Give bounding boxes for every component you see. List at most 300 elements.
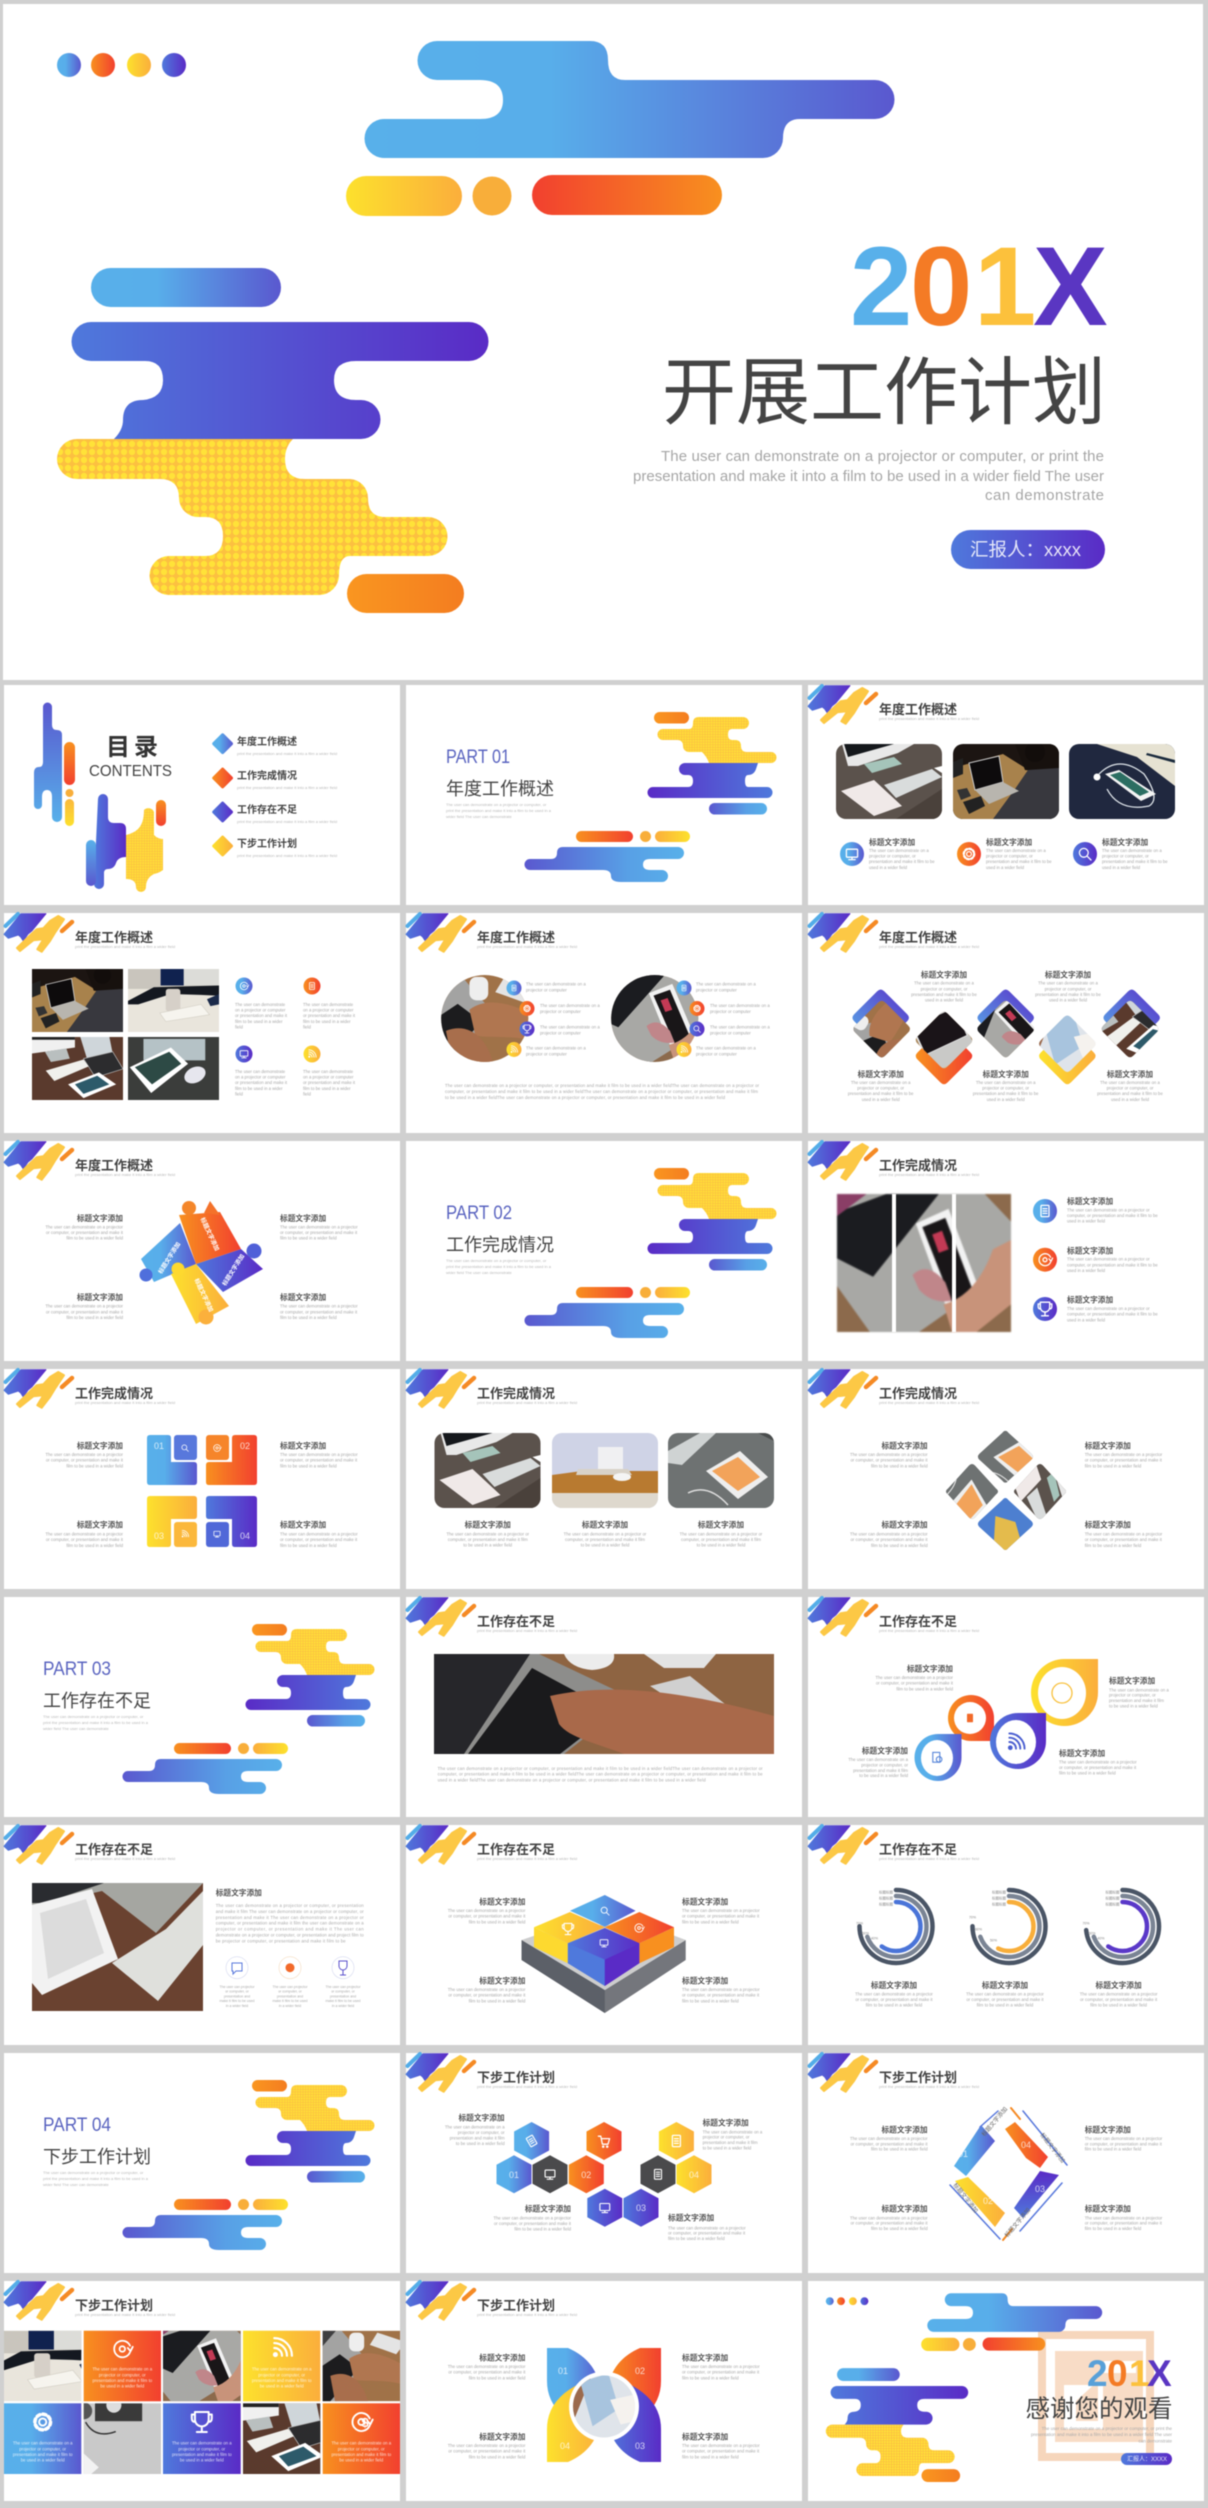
- caption 4: film to be used in a wider field: [1059, 1770, 1116, 1776]
- puzzle diagram: 标题文字添加: [193, 1277, 215, 1313]
- caption 3: or computer, or presentation and make it: [494, 2221, 572, 2226]
- caption 3: computer, or presentation and make it film: [681, 1537, 761, 1542]
- caption top right: film to be used in a wider field: [1085, 2147, 1142, 2152]
- panel: cover slide: [3, 4, 1203, 680]
- photo 2: [552, 1433, 658, 1508]
- frame diagram: 标题文字添加: [951, 2181, 980, 2214]
- caption 2: The user can demonstrate on a projector or: [564, 1531, 647, 1536]
- section description: wider field The user can demonstrate: [446, 1270, 513, 1275]
- text block 4: or presentation and make it: [303, 1080, 356, 1085]
- text block 1: The user can demonstrate on a projector or: [1067, 1207, 1150, 1212]
- cover description: can demonstrate: [985, 487, 1104, 504]
- mosaic yellow cell: be used in a wider field: [260, 2384, 304, 2388]
- panel: numbered blocks: [4, 1369, 400, 1589]
- caption bottom left: 标题文字添加: [77, 1520, 123, 1530]
- caption top left: [45, 1213, 124, 1241]
- mosaic orange cell: The user can demonstrate on a: [92, 2367, 153, 2372]
- caption top left: or computer, or presentation and make it: [46, 1458, 124, 1463]
- section artwork: [524, 712, 776, 882]
- paragraph: computer, or presentation and make it film the user can demonstrate on a: [216, 1921, 364, 1926]
- panel: part 04 section slide: [4, 2053, 400, 2273]
- caption 4: 标题文字添加: [1059, 1748, 1105, 1758]
- caption top right: The user can demonstrate on a projector: [682, 2364, 760, 2369]
- panel: teardrop diagram: [808, 1597, 1204, 1817]
- caption top left: [45, 1440, 124, 1468]
- caption top right: or computer, or presentation and make it: [1085, 1458, 1163, 1463]
- text block 1: film to be used in a wider: [235, 1019, 283, 1024]
- caption top left: film to be used in a wider field: [66, 1236, 124, 1241]
- caption 2: 标题文字添加: [703, 2117, 749, 2127]
- caption top 1: projector or computer, or: [921, 986, 968, 991]
- paragraph: presentation and make it The user can demonstrate on a projector or: [216, 1915, 364, 1920]
- text block 4: on a projector or computer: [303, 1075, 354, 1080]
- caption bottom 1: 标题文字添加: [858, 1069, 904, 1079]
- caption 2: projector or computer, or: [703, 2135, 750, 2140]
- caption bottom left: or computer, or presentation and make it: [850, 1537, 928, 1542]
- header logo: [406, 1370, 474, 1408]
- teardrop blue: [914, 1734, 962, 1781]
- ring chart 2: 60%: [975, 1928, 982, 1932]
- ring chart 2: [969, 1890, 1046, 1963]
- caption top right: The user can demonstrate on a projector: [280, 1452, 358, 1457]
- ring chart 2: 70%: [969, 1916, 976, 1920]
- mosaic purple cell: [163, 2403, 241, 2474]
- caption bottom 1: used in a wider field: [862, 1097, 900, 1102]
- part label: PART 04: [43, 2115, 111, 2136]
- header logo: [808, 1598, 876, 1636]
- caption bottom 3: used in a wider field: [1111, 1097, 1150, 1102]
- puzzle diagram: [140, 1201, 263, 1324]
- caption bottom right: [1085, 2204, 1163, 2231]
- slide subtitle: print the presentation and make it into a film a wider field: [75, 1172, 175, 1177]
- caption bottom right: or computer, or presentation and make it: [1085, 2221, 1163, 2226]
- caption bottom left: 标题文字添加: [479, 1975, 526, 1985]
- caption 2: 标题文字添加: [982, 1980, 1028, 1990]
- caption top left: The user can demonstrate on a projector: [850, 1452, 928, 1457]
- wide photo: [434, 1654, 774, 1754]
- block 02: [206, 1435, 257, 1485]
- diamond 4: [1038, 1015, 1096, 1085]
- caption top right: 标题文字添加: [280, 1213, 326, 1223]
- agenda item 4: 下步工作计划: [237, 837, 297, 850]
- slide subtitle: print the presentation and make it into a film a wider field: [75, 2312, 175, 2317]
- caption top right: The user can demonstrate on a projector: [682, 1908, 760, 1913]
- frame diagram: 01: [958, 2149, 968, 2159]
- panel: four photo grid: [4, 913, 400, 1133]
- three strip photo: [837, 1194, 1011, 1332]
- caption 3: [493, 2204, 572, 2232]
- cover description: The user can demonstrate on a projector or computer, or print the: [661, 448, 1104, 465]
- caption bottom left: [448, 1975, 526, 2003]
- caption 2: The user can demonstrate on a projector: [966, 1991, 1044, 1996]
- caption 1: 标题文字添加: [465, 1520, 511, 1530]
- main title: 开展工作计划: [662, 351, 1106, 434]
- caption 2: film to be used in a wider field: [977, 2003, 1034, 2008]
- agenda item 2: [212, 768, 337, 790]
- header logo: [4, 2282, 72, 2320]
- paragraph: be projector or computer, or presentation and make it film to be: [216, 1938, 346, 1943]
- cover artwork: clouds, pills and dots: [57, 41, 894, 613]
- puzzle diagram: 标题文字添加: [156, 1241, 182, 1275]
- rhombus photo left: [945, 1463, 999, 1520]
- mosaic photo 5: [232, 2403, 332, 2474]
- caption top left: [448, 2352, 526, 2380]
- caption top 2: used in a wider field: [1049, 998, 1088, 1002]
- caption bottom right: film to be used in a wider field: [1085, 1543, 1142, 1548]
- icon: gear: [957, 842, 981, 866]
- text block 4: field: [303, 1091, 311, 1096]
- caption top left: The user can demonstrate on a projector: [850, 2136, 928, 2141]
- text block 2: projector or computer, or: [986, 854, 1033, 859]
- section description: print the presentation and make it into a film to be used in a: [446, 808, 552, 813]
- caption bottom 1: [848, 1069, 914, 1102]
- caption 1: 标题文字添加: [871, 1980, 917, 1990]
- icon 3: [1033, 1297, 1057, 1321]
- year 201X: 0: [1107, 2353, 1128, 2394]
- icon caption 3: in a wider field: [332, 2004, 354, 2008]
- header logo: [406, 1826, 474, 1864]
- 3D diamond: [522, 1895, 686, 2013]
- circular photo left: [440, 974, 530, 1063]
- teardrop yellow: [1031, 1659, 1098, 1726]
- photo 2: [953, 742, 1059, 819]
- slide title: 工作存在不足: [477, 1614, 555, 1629]
- caption bottom right: [280, 1292, 358, 1320]
- block 03: [147, 1496, 197, 1547]
- ring chart 3: 60%: [1088, 1932, 1096, 1936]
- caption bottom 1: projector or computer, or: [857, 1086, 905, 1091]
- icon 2: [1033, 1248, 1057, 1272]
- mosaic orange cell 2: presentation and make it film to: [331, 2452, 392, 2457]
- left captions: [526, 981, 600, 1057]
- frame diagram: 03: [1035, 2184, 1045, 2194]
- caption top 2: [1035, 970, 1101, 1002]
- caption bottom left: or computer, or presentation and make it: [448, 1993, 526, 1998]
- icon 4: [304, 1046, 320, 1062]
- hexagon cluster: [496, 2122, 712, 2227]
- caption bottom right: film to be used in a wider field: [682, 2454, 739, 2459]
- caption bottom 2: presentation and make it film to be: [973, 1091, 1039, 1096]
- left captions: The user can demonstrate on a: [540, 1024, 600, 1029]
- mosaic orange cell: presentation and make it film to: [92, 2378, 153, 2383]
- block 02: 02: [240, 1441, 250, 1451]
- header logo: [4, 1142, 72, 1180]
- caption bottom right: film to be used in a wider field: [1085, 2226, 1142, 2231]
- section description: print the presentation and make it into a film to be used in a: [43, 2176, 149, 2181]
- text block 2: 标题文字添加: [986, 837, 1032, 847]
- caption 1: presentation and make it film: [450, 2136, 505, 2140]
- right captions: The user can demonstrate on a: [696, 981, 756, 986]
- caption 1: The user can demonstrate on a projector or: [446, 1531, 530, 1536]
- caption 2: The user can demonstrate on a: [1109, 1687, 1169, 1692]
- right captions: The user can demonstrate on a: [710, 1003, 770, 1008]
- mosaic blue cell: The user can demonstrate on a: [13, 2441, 73, 2446]
- caption 2: [564, 1520, 647, 1548]
- caption bottom right: or computer, or presentation and make it: [280, 1537, 358, 1542]
- right icon dots: [676, 980, 704, 1057]
- slide subtitle: print the presentation and make it into a film a wider field: [75, 944, 175, 949]
- text block 1: computer, or presentation and make it film to be: [1067, 1213, 1158, 1218]
- caption bottom right: [682, 1975, 760, 2003]
- caption top left: 标题文字添加: [881, 1440, 928, 1450]
- panel: wide photo slide: [406, 1597, 802, 1817]
- caption bottom right: 标题文字添加: [280, 1292, 326, 1302]
- caption bottom left: film to be used in a wider field: [469, 1998, 526, 2003]
- section description: wider field The user can demonstrate: [446, 814, 513, 819]
- ring chart 1: 70%: [856, 1922, 863, 1926]
- section description: The user can demonstrate on a projector or computer, or: [446, 1258, 547, 1263]
- year 201X: 1: [1129, 2353, 1150, 2394]
- teardrop purple: [990, 1713, 1046, 1769]
- caption bottom left: The user can demonstrate on a projector: [45, 1531, 124, 1536]
- caption bottom 1: presentation and make it film to be: [848, 1091, 914, 1096]
- slide title: 工作完成情况: [477, 1386, 555, 1401]
- bottom paragraph: The user can demonstrate on a projector or computer, or presentation and make it film to be used in a wider fieldThe user can demonstrate on a projector or: [445, 1083, 760, 1088]
- text block 2: or presentation and make it: [303, 1013, 356, 1018]
- left captions: projector or computer: [540, 1009, 581, 1014]
- icon: monitor: [840, 842, 864, 866]
- slide subtitle: print the presentation and make it into a film a wider field: [477, 2312, 577, 2317]
- text block 1: 标题文字添加: [869, 837, 915, 847]
- caption 2: [966, 1980, 1044, 2008]
- slide subtitle: print the presentation and make it into a film a wider field: [477, 1856, 577, 1861]
- caption top right: [280, 1440, 358, 1468]
- caption top left: or computer, or presentation and make it: [46, 1230, 124, 1235]
- header logo: [808, 1826, 876, 1864]
- caption 1: to be used in a wider field: [456, 2141, 505, 2146]
- caption top left: 标题文字添加: [77, 1440, 123, 1450]
- slide title: 年度工作概述: [477, 930, 555, 945]
- caption 1: or computer, or presentation and make it: [876, 1681, 954, 1686]
- text block 3: film to be used in a wider: [235, 1086, 283, 1091]
- block 03: 03: [154, 1531, 164, 1541]
- text block 3: The user can demonstrate on a projector or: [1067, 1306, 1150, 1311]
- caption bottom left: [45, 1292, 124, 1320]
- mosaic blue cell: presentation and make it film to: [13, 2452, 73, 2457]
- slide subtitle: print the presentation and make it into a film a wider field: [879, 716, 979, 721]
- hexagon cluster: 03: [636, 2203, 646, 2213]
- caption bottom left: The user can demonstrate on a projector: [850, 1531, 928, 1536]
- slide subtitle: print the presentation and make it into a film a wider field: [477, 1400, 577, 1405]
- text block 1: [1067, 1196, 1158, 1224]
- ring chart 1: 标题标题: [879, 1896, 893, 1900]
- mosaic orange cell: be used in a wider field: [100, 2384, 145, 2388]
- caption top right: [682, 1896, 760, 1924]
- paragraph: demonstrate on a projector or computer, or presentation and project film to: [216, 1932, 364, 1938]
- caption bottom right: [1085, 1520, 1163, 1548]
- header logo: [406, 2282, 474, 2320]
- caption 1: projector or computer, or: [458, 2130, 505, 2135]
- slide title: 下步工作计划: [477, 2298, 555, 2313]
- header logo: [808, 2054, 876, 2092]
- panel: part 03 section slide: [4, 1597, 400, 1817]
- caption 1: film to be used in a wider field: [896, 1686, 954, 1691]
- caption top right: or computer, or presentation and make it: [1085, 2141, 1163, 2146]
- text block 3: 标题文字添加: [1102, 837, 1148, 847]
- caption 4: The user can demonstrate on a projector: [668, 2225, 746, 2230]
- mosaic blue cell: [4, 2403, 81, 2474]
- slide subtitle: print the presentation and make it into a film a wider field: [879, 944, 979, 949]
- section title: 年度工作概述: [446, 779, 554, 799]
- diamond 2: [915, 1011, 973, 1085]
- caption bottom left: film to be used in a wider field: [871, 1543, 928, 1548]
- caption 3: 标题文字添加: [1096, 1980, 1142, 1990]
- panel: three photos with icons: [808, 685, 1204, 905]
- caption top left: The user can demonstrate on a projector: [45, 1224, 124, 1229]
- slide title: 下步工作计划: [879, 2070, 957, 2085]
- caption bottom left: The user can demonstrate on a projector: [448, 2443, 526, 2448]
- caption top right: 标题文字添加: [682, 1896, 728, 1906]
- mosaic blue cell: be used in a wider field: [21, 2458, 65, 2462]
- header logo: [808, 686, 876, 724]
- text block 4: The user can demonstrate: [303, 1069, 354, 1074]
- right captions: projector or computer: [710, 1009, 751, 1014]
- seal stamp watermark: [1042, 2335, 1150, 2457]
- rhombus photo top: [977, 1430, 1034, 1484]
- slide title: 工作完成情况: [879, 1386, 957, 1401]
- caption 1: computer, or presentation and make it film: [448, 1537, 528, 1542]
- caption 3: 标题文字添加: [698, 1520, 744, 1530]
- block 04: 04: [240, 1531, 250, 1541]
- caption 1: [875, 1663, 954, 1691]
- caption 4: or computer, or presentation and make it: [668, 2231, 746, 2236]
- caption bottom 3: presentation and make it film to be: [1097, 1091, 1163, 1096]
- text block 3: used in a wider field: [1067, 1317, 1106, 1322]
- caption 2: presentation and make it film: [703, 2140, 758, 2145]
- photo 3: [1069, 744, 1175, 819]
- caption 1: 标题文字添加: [458, 2113, 505, 2123]
- caption top right: [1085, 2124, 1163, 2152]
- part label: PART 02: [446, 1203, 512, 1224]
- section description: print the presentation and make it into a film to be used in a: [43, 1720, 149, 1725]
- right captions: projector or computer: [696, 987, 737, 992]
- slide title: 工作存在不足: [879, 1614, 957, 1629]
- caption top left: The user can demonstrate on a projector: [448, 2364, 526, 2369]
- text block 3: [1102, 837, 1168, 870]
- ring chart 1: 60%: [862, 1932, 869, 1936]
- caption bottom left: [850, 1520, 928, 1548]
- bottom paragraph: to be used in a wider fieldThe user can demonstrate on a projector or computer, or presentation and make it film to be used in a wider field: [445, 1095, 726, 1100]
- ring chart 2: 标题标题: [992, 1890, 1006, 1894]
- icon caption 3: The user can projector: [325, 1985, 361, 1989]
- text block 3: on a projector or computer: [235, 1075, 286, 1080]
- header logo: [4, 1370, 72, 1408]
- mosaic orange cell 2: be used in a wider field: [339, 2458, 384, 2462]
- caption top left: film to be used in a wider field: [469, 2375, 526, 2380]
- paragraph: and make it film The user can demonstrate on a projector or computer, or: [216, 1909, 364, 1914]
- mosaic yellow cell: presentation and make it film to: [252, 2378, 312, 2383]
- caption top left: The user can demonstrate on a projector: [45, 1452, 124, 1457]
- caption bottom 2: The user can demonstrate on a: [976, 1080, 1036, 1085]
- caption top right: The user can demonstrate on a projector: [280, 1224, 358, 1229]
- icon caption 3: or computer, or: [331, 1990, 356, 1994]
- teardrop orange: [948, 1695, 994, 1741]
- part label: PART 03: [43, 1659, 111, 1680]
- text block 2: used in a wider field: [1067, 1268, 1106, 1273]
- diamond 5: [1101, 988, 1161, 1058]
- caption bottom left: or computer, or presentation and make it: [46, 1309, 124, 1314]
- caption top left: 标题文字添加: [77, 1213, 123, 1223]
- large photo: [32, 1883, 203, 2011]
- caption 2: to be used in a wider field: [581, 1543, 630, 1548]
- caption top right: film to be used in a wider field: [280, 1236, 337, 1241]
- header logo: [4, 914, 72, 952]
- section description: The user can demonstrate on a projector or computer, or: [43, 1714, 144, 1719]
- caption 4: 标题文字添加: [668, 2213, 714, 2223]
- agenda item 3: print the presentation and make it into a film a wider field: [237, 819, 337, 824]
- agenda item 4: print the presentation and make it into a film a wider field: [237, 853, 337, 858]
- caption bottom right: [280, 1520, 358, 1548]
- caption bottom right: 标题文字添加: [1085, 1520, 1131, 1530]
- caption 3: or computer, or presentation and make it: [1080, 1997, 1158, 2002]
- slide subtitle: print the presentation and make it into a film a wider field: [477, 2084, 577, 2089]
- icon caption 3: presentation and: [330, 1994, 356, 1998]
- caption top right: or computer, or presentation and make it: [280, 1230, 358, 1235]
- text block 3: 标题文字添加: [1067, 1295, 1113, 1305]
- caption bottom left: The user can demonstrate on a projector: [850, 2215, 928, 2220]
- panel: part 02 section slide: [406, 1141, 802, 1361]
- caption bottom left: The user can demonstrate on a projector: [448, 1987, 526, 1992]
- mosaic orange cell: projector or computer, or: [99, 2372, 146, 2377]
- slide title: 工作存在不足: [879, 1842, 957, 1857]
- caption bottom left: [850, 2204, 928, 2231]
- slide title: 年度工作概述: [879, 702, 957, 717]
- caption 3: 标题文字添加: [525, 2204, 571, 2214]
- hexagon cluster: 02: [581, 2170, 591, 2180]
- mosaic photo 2: [152, 2331, 252, 2401]
- flower diagram: 04: [560, 2441, 570, 2451]
- year 201X: X: [1147, 2353, 1172, 2394]
- ring chart 3: 70%: [1082, 1922, 1090, 1926]
- panel: hexagon diagram: [406, 2053, 802, 2273]
- text title: 标题文字添加: [216, 1888, 262, 1898]
- caption top left: film to be used in a wider field: [469, 1919, 526, 1924]
- caption bottom 2: used in a wider field: [987, 1097, 1025, 1102]
- text block 3: projector or computer, or: [1102, 854, 1149, 859]
- caption bottom right: The user can demonstrate on a projector: [280, 1304, 358, 1309]
- caption top 2: presentation and make it film to be: [1035, 992, 1101, 997]
- agenda item 2: print the presentation and make it into a film a wider field: [237, 785, 337, 790]
- caption 3: film to be used in a wider field: [514, 2226, 572, 2232]
- slide subtitle: print the presentation and make it into a film a wider field: [75, 1400, 175, 1405]
- caption bottom left: or computer, or presentation and make it: [448, 2449, 526, 2454]
- caption 1: film to be used in a wider field: [866, 2003, 923, 2008]
- slide subtitle: print the presentation and make it into a film a wider field: [879, 1400, 979, 1405]
- reporter badge: [1121, 2453, 1172, 2465]
- right captions: [696, 981, 770, 1057]
- caption top left: film to be used in a wider field: [66, 1463, 124, 1468]
- mosaic purple cell: projector or computer, or: [178, 2446, 226, 2451]
- caption bottom 3: The user can demonstrate on a: [1100, 1080, 1160, 1085]
- ring chart 2: 标题标题: [992, 1902, 1006, 1906]
- slide subtitle: print the presentation and make it into a film a wider field: [477, 944, 577, 949]
- mosaic blue cell: projector or computer, or: [19, 2446, 67, 2451]
- caption top 1: The user can demonstrate on a: [914, 981, 974, 986]
- caption top left: [448, 1896, 526, 1924]
- caption 3: [1080, 1980, 1158, 2008]
- slide title: 年度工作概述: [75, 1158, 153, 1173]
- text block 1: on a projector or computer: [235, 1008, 286, 1013]
- panel: rotating frame diagram: [808, 2053, 1204, 2273]
- caption bottom right: The user can demonstrate on a projector: [682, 2443, 760, 2448]
- mosaic yellow cell: The user can demonstrate on a: [252, 2367, 312, 2372]
- caption top left: or computer, or presentation and make it: [850, 1458, 928, 1463]
- caption 2: to be used in a wider field: [703, 2146, 752, 2150]
- caption top left: 标题文字添加: [479, 2352, 526, 2362]
- slide subtitle: print the presentation and make it into a film a wider field: [879, 1856, 979, 1861]
- photo 1: [836, 744, 942, 819]
- text block 2: on a projector or computer: [303, 1008, 354, 1013]
